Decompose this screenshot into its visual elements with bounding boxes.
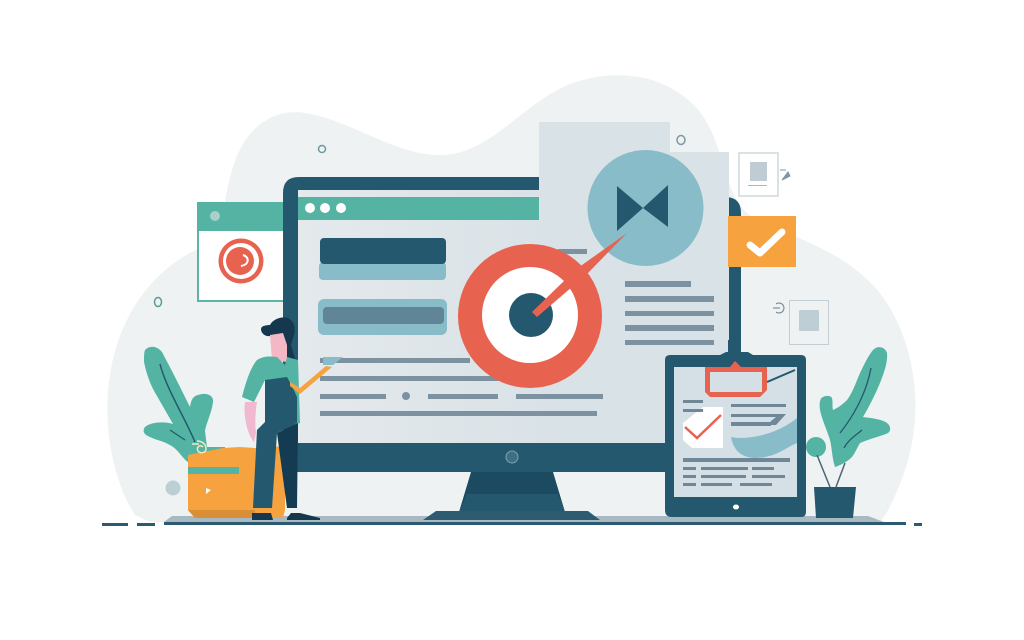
tablet text lines: [683, 400, 790, 486]
teal circle with bow tie: [588, 150, 704, 266]
shirt: [242, 356, 300, 425]
check card: [683, 407, 723, 448]
small square icon: [773, 300, 828, 344]
monitor base: [423, 511, 600, 520]
paper lines: [558, 249, 714, 345]
orange folder: [166, 441, 285, 518]
text lines: [320, 358, 597, 416]
red clip: [705, 361, 795, 397]
pointer arm: [290, 366, 332, 394]
right leg: [277, 423, 298, 508]
arm: [245, 402, 257, 442]
overalls and legs: [253, 377, 297, 508]
background blob: [107, 75, 915, 522]
hair: [261, 317, 297, 366]
face and neck: [270, 333, 287, 362]
plant left: [144, 347, 225, 462]
paper sheet: [539, 122, 729, 443]
small ring right: [677, 136, 685, 144]
blue wave: [731, 418, 797, 458]
lower text lines: [450, 376, 603, 416]
needle: [532, 233, 627, 317]
card one: [319, 238, 446, 280]
browser window with target: [197, 202, 288, 301]
small ring top: [318, 146, 326, 152]
small ring left: [154, 298, 162, 306]
shoes: [252, 513, 320, 520]
bullseye target: [458, 233, 627, 388]
monitor: [283, 177, 741, 520]
person: [242, 317, 343, 520]
ground line: [102, 522, 922, 526]
card two: [318, 299, 447, 335]
small document icon: [739, 153, 790, 196]
plant pot: [814, 487, 856, 518]
orange check badge: [728, 216, 796, 267]
monitor stand: [459, 472, 565, 512]
monitor chin button: [506, 451, 518, 463]
pointer hand: [323, 357, 343, 365]
tablet connector: [728, 340, 740, 356]
plant right: [806, 347, 890, 487]
window dots: [305, 203, 346, 213]
tablet home button: [733, 504, 739, 510]
tablet: [665, 340, 806, 517]
browser bar: [298, 197, 541, 220]
platform: [164, 516, 884, 522]
